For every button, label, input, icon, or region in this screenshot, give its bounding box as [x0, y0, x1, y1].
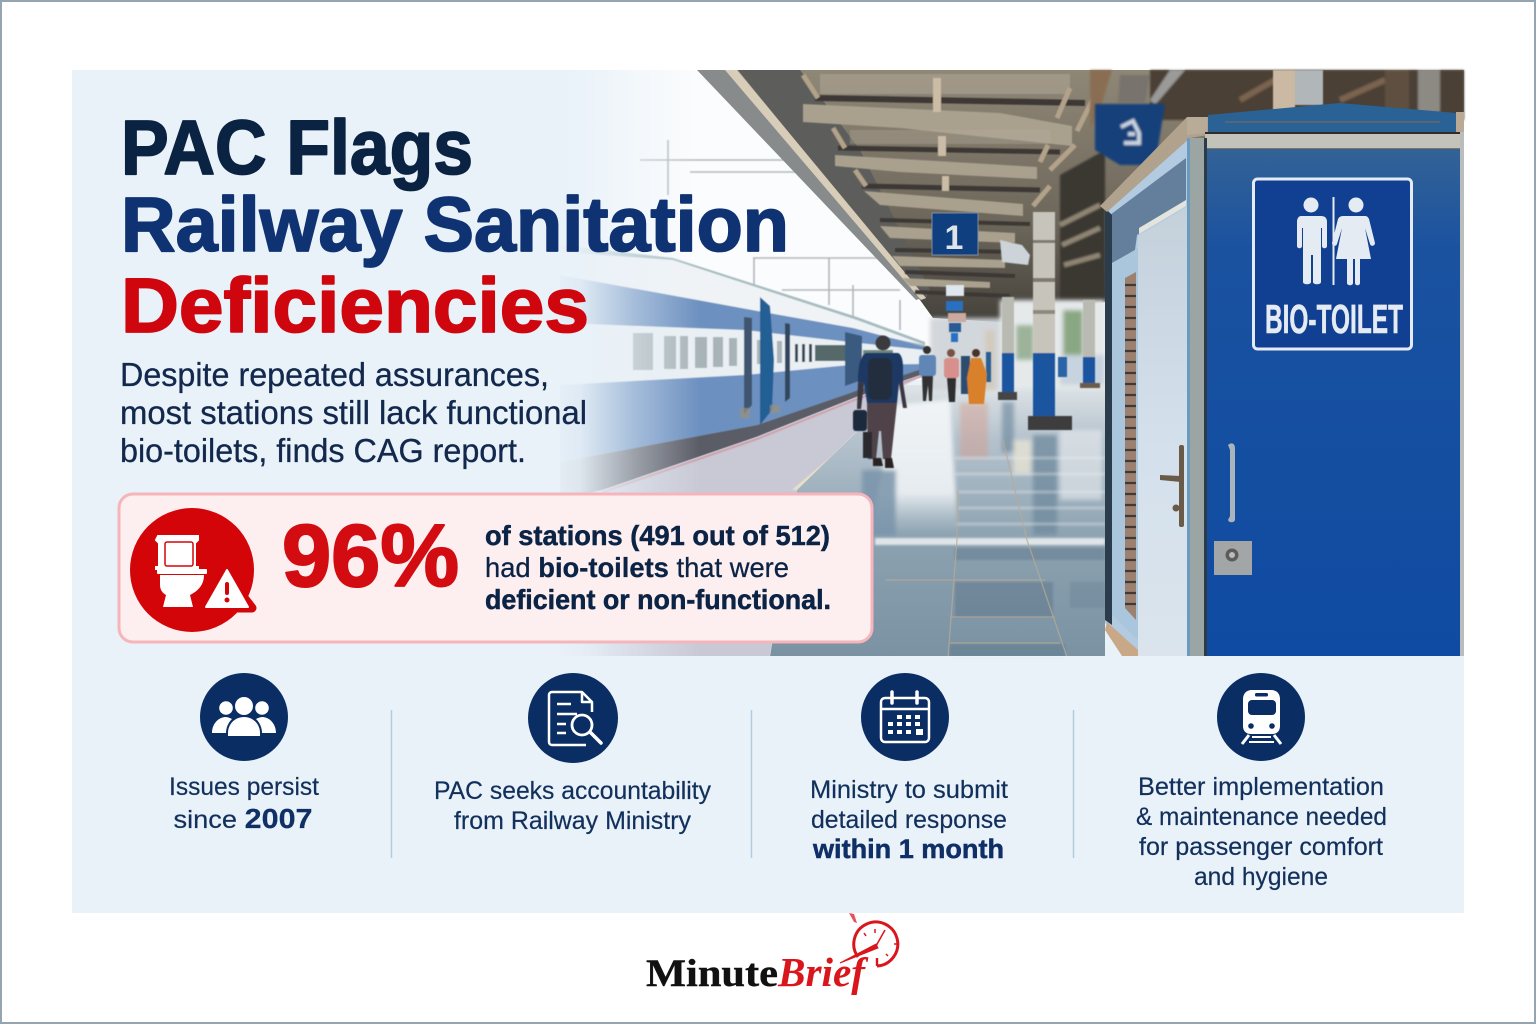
- dark arches right of pillar: [1060, 150, 1105, 300]
- door handle: [1228, 443, 1235, 522]
- column dividers: [392, 710, 1074, 858]
- text: [434, 777, 711, 835]
- icon: toilet with warning: [130, 508, 254, 632]
- title: Railway Sanitation: [121, 182, 789, 268]
- platform edge with yellow line: [560, 372, 930, 657]
- subtitle: [120, 356, 587, 469]
- callout: 96% of stations: [119, 494, 872, 642]
- subtitle: Despite repeated assurances,: [120, 356, 549, 393]
- roof soffit: [738, 70, 930, 300]
- louvre: [1125, 272, 1136, 620]
- text: [810, 776, 1008, 864]
- text: Ministry to submit: [810, 776, 1008, 804]
- platform number sign: [932, 213, 978, 257]
- statistic description: of stations (491 out of 512): [485, 520, 830, 551]
- booth corner post: [1187, 138, 1192, 656]
- subtitle: most stations still lack functional: [120, 394, 587, 431]
- platform number sign: 1: [945, 219, 963, 257]
- statistic description: had bio-toilets that were: [485, 552, 789, 583]
- logo clock: [840, 913, 898, 966]
- text: from Railway Ministry: [454, 807, 691, 835]
- sign divider: [1332, 197, 1334, 285]
- title: [121, 105, 789, 349]
- column: better implementation: [1136, 673, 1387, 891]
- text: detailed response: [811, 806, 1007, 834]
- text: since 2007: [174, 803, 312, 834]
- text: Issues persist: [169, 773, 319, 801]
- icon: woman: [1332, 198, 1375, 285]
- icon: calendar: [861, 673, 949, 761]
- logo: MinuteBrief: Brief: [777, 949, 869, 995]
- booth-side roof post: [1273, 70, 1323, 110]
- booth roof trim: [1100, 117, 1208, 212]
- column: ministry to submit: [810, 673, 1008, 864]
- foreground traveller with backpack: [853, 336, 907, 468]
- train: [560, 245, 930, 500]
- booth side wall: [1105, 130, 1190, 656]
- statistic description: deficient or non-functional.: [485, 584, 831, 615]
- subtitle: bio-toilets, finds CAG report.: [120, 432, 526, 469]
- small hanging signs: [946, 285, 966, 342]
- sign label: BIO-TOILET: [1265, 296, 1403, 342]
- column: issues persist: [169, 673, 319, 834]
- distant overhead poles: [640, 140, 900, 330]
- platform roof: [697, 70, 1464, 322]
- bio-toilet sign: [1254, 179, 1412, 349]
- text: within 1 month: [812, 834, 1004, 864]
- text: & maintenance needed: [1136, 803, 1387, 831]
- side door: [1138, 207, 1187, 656]
- logo wordmark: Minute: [646, 952, 778, 995]
- statistic description: [485, 520, 831, 615]
- bio-toilet booth: [1100, 103, 1464, 656]
- column: PAC seeks accountability: [434, 673, 711, 835]
- text: Better implementation: [1138, 773, 1384, 801]
- photo: railway platform with bio-toilet: [540, 70, 1464, 658]
- title: PAC Flags: [121, 105, 473, 191]
- main panel: [72, 70, 1464, 913]
- icon: people: [200, 673, 288, 761]
- text: PAC seeks accountability: [434, 777, 711, 805]
- bottom edge cover: [540, 656, 1464, 658]
- upper roof behind booth: [1090, 70, 1464, 130]
- text: [1136, 773, 1387, 891]
- text: [169, 773, 319, 834]
- callout box: [119, 494, 872, 642]
- booth front panel: [1207, 149, 1460, 656]
- text: and hygiene: [1194, 863, 1328, 891]
- passengers in background: [919, 346, 987, 404]
- title: Deficiencies: [121, 263, 589, 349]
- platform floor: [770, 385, 1105, 657]
- icon: man: [1297, 198, 1327, 284]
- text: for passenger comfort: [1139, 833, 1383, 861]
- icon: document with magnifier: [528, 673, 618, 763]
- metal lock plate: [1214, 541, 1252, 575]
- statistic: 96%: [282, 506, 459, 605]
- left fade over photo: [540, 70, 700, 657]
- background structures past pillars: [930, 300, 1105, 390]
- hanging white sign by pillar: [1000, 240, 1030, 265]
- blue hanging sign: [1095, 104, 1165, 165]
- platform pillars: [986, 212, 1100, 430]
- icon: train: [1217, 673, 1305, 761]
- door latch on side: [1160, 445, 1184, 527]
- sky: [540, 70, 940, 380]
- logo: MinuteBrief: [646, 913, 898, 995]
